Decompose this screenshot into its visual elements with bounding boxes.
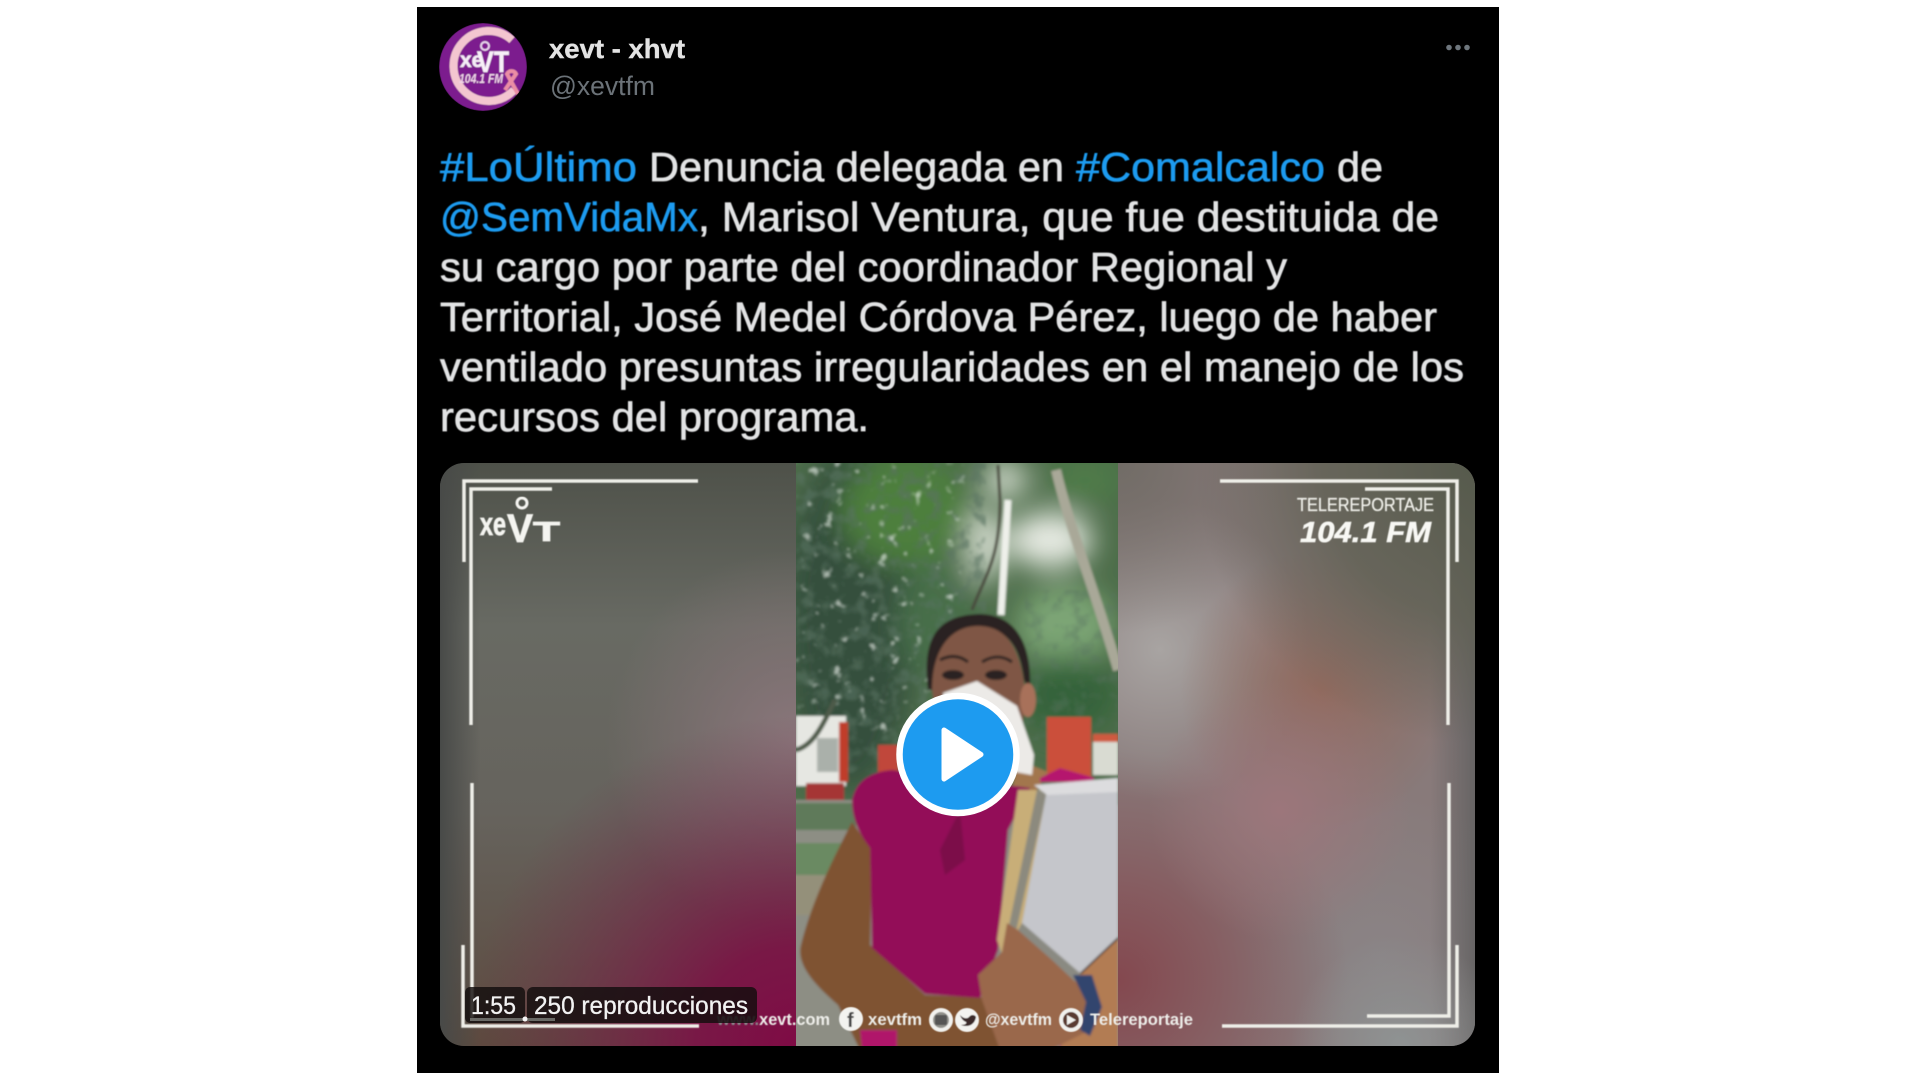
trees and sky background — [785, 450, 1125, 805]
left blurred panel — [440, 463, 796, 1046]
duration and view count badge: 1:55 — [471, 992, 516, 1020]
avatar: xevt logo: VT — [477, 46, 509, 79]
ground — [796, 798, 858, 914]
play button — [900, 696, 1016, 813]
tweet screenshot card — [417, 7, 1499, 1073]
binder shadow edge — [1080, 937, 1118, 973]
tweet header — [439, 23, 1470, 111]
more options dots — [1446, 45, 1470, 50]
center video frame: woman outdoors — [785, 450, 1125, 1050]
tweet text: ventilado presuntas irregularidades en el manejo de los — [440, 344, 1464, 390]
duration and view count badge — [465, 987, 757, 1023]
watermark: social handles — [716, 1007, 1193, 1032]
account handle: @xevtfm — [550, 71, 655, 101]
tweet text: , Marisol Ventura, que fue destituida de — [698, 194, 1439, 240]
tweet text: Denuncia delegada en — [649, 144, 1064, 190]
hand holding folder — [978, 923, 1090, 1050]
tweet text: #Comalcalco — [1076, 144, 1325, 190]
woman: magenta blouse — [852, 770, 1030, 998]
video player — [440, 450, 1475, 1050]
logo: xeVT: T — [533, 516, 560, 547]
blue bracelet — [1073, 975, 1102, 1036]
label: Telereportaje 104.1 FM: TELEREPORTAJE — [1297, 495, 1434, 515]
watermark: social handles: xevtfm — [868, 1010, 922, 1029]
right blurred panel — [1118, 463, 1475, 1046]
black tweet panel — [417, 7, 1499, 1073]
woman: face mask — [943, 681, 1034, 775]
tweet text: @SemVidaMx — [440, 194, 698, 240]
buildings right — [1047, 717, 1118, 779]
right forearm — [1060, 938, 1118, 1050]
avatar: xevt logo: xe — [460, 49, 483, 72]
white binder — [1022, 780, 1118, 973]
avatar: xevt logo — [439, 23, 527, 111]
woman: shoulder skin — [1012, 765, 1048, 791]
watermark: social handles: f — [847, 1010, 854, 1032]
tweet text — [440, 144, 1464, 440]
logo: xeVT — [480, 498, 560, 551]
tweet text: Territorial, José Medel Córdova Pérez, luego de haber — [440, 294, 1437, 340]
avatar: xevt logo: 104.1 FM — [459, 71, 504, 86]
label: Telereportaje 104.1 FM: 104.1 FM — [1300, 517, 1432, 549]
label: Telereportaje 104.1 FM — [1296, 497, 1434, 544]
woman: left arm — [799, 822, 1000, 1046]
watermark: social handles: Telereportaje — [1090, 1010, 1193, 1029]
woman: head and hair — [926, 613, 1038, 721]
tweet text: recursos del programa. — [440, 394, 869, 440]
tweet text: de — [1337, 144, 1383, 190]
buildings left — [796, 700, 898, 801]
tweet text: #LoÚltimo — [440, 144, 637, 190]
duration and view count badge: 250 reproducciones — [534, 992, 748, 1020]
frame lines: corners — [463, 481, 1457, 1026]
logo: xeVT: xe — [480, 506, 506, 542]
tweet text: su cargo por parte del coordinador Regional y — [440, 244, 1287, 290]
watermark: social handles: @xevtfm — [985, 1010, 1052, 1029]
logo: xeVT: V — [507, 507, 533, 551]
account name: xevt - xhvt — [549, 34, 685, 64]
folder spine — [997, 790, 1047, 957]
watermark: social handles: www.xevt.com — [716, 1010, 830, 1029]
